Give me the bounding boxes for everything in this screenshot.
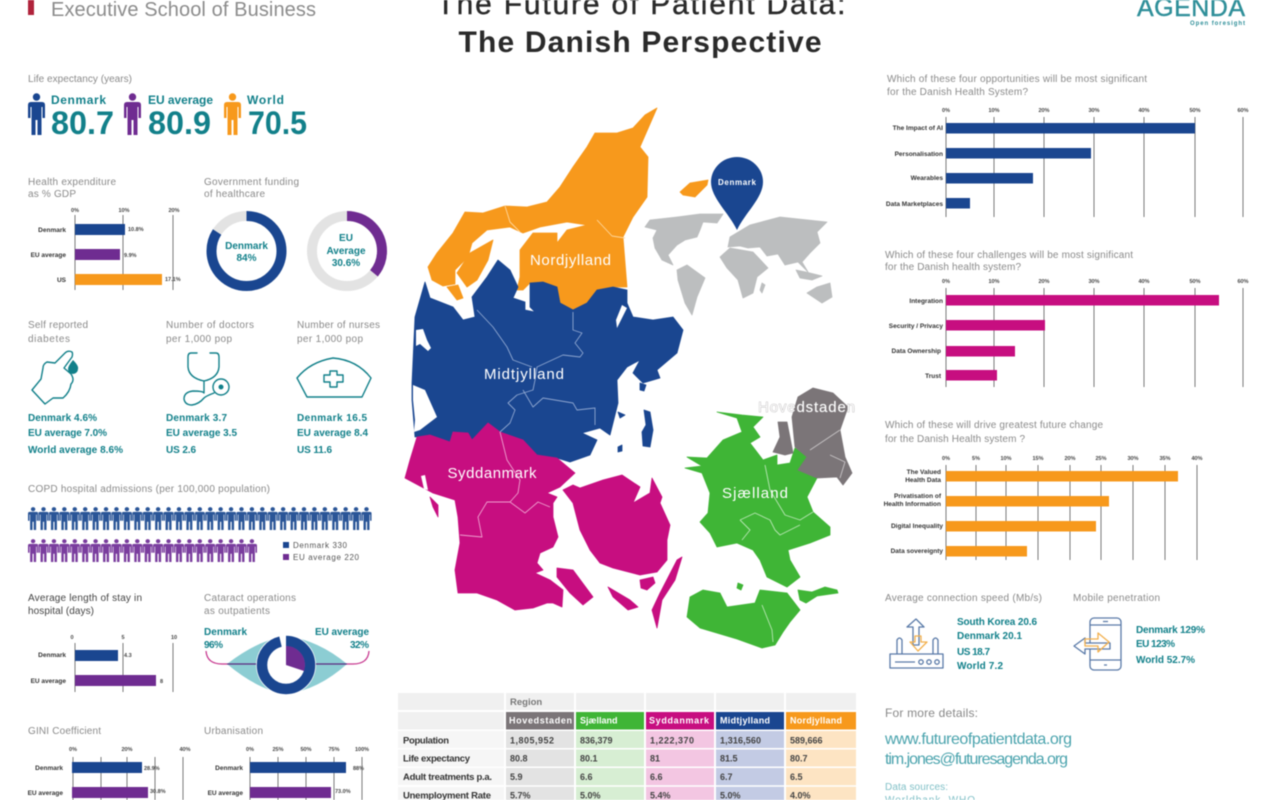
chart: health expenditure bbox=[28, 177, 181, 290]
chart: challenges bbox=[885, 250, 1249, 387]
chart: government funding donuts: Government funding bbox=[204, 177, 299, 188]
world continents bbox=[645, 214, 832, 315]
chart: average length of stay: 0 bbox=[70, 635, 74, 641]
chart: COPD hospital admissions pictogram: COPD hospital admissions (per 100,000 population) bbox=[28, 484, 270, 495]
stat: life expectancy values bbox=[51, 93, 307, 141]
chart: opportunities: for the Danish Health System? bbox=[887, 87, 1028, 98]
panel: mobile penetration bbox=[1073, 593, 1205, 670]
chart: urbanisation: 73.0% bbox=[335, 789, 351, 795]
contact details: Data sources: bbox=[885, 782, 948, 793]
legend: Denmark 330 bbox=[293, 541, 348, 550]
panel: number of doctors: US 2.6 bbox=[166, 445, 196, 456]
region borders bbox=[460, 206, 845, 642]
chart: urbanisation: Denmark bbox=[215, 765, 243, 772]
donut: Denmark: 84% bbox=[236, 253, 257, 264]
icon: stethoscope bbox=[184, 353, 229, 405]
donut: pupil bbox=[256, 635, 316, 695]
chart: cataract operations eye bbox=[204, 593, 369, 695]
chart: health expenditure: 20% bbox=[168, 208, 180, 214]
chart: urbanisation: 25% bbox=[272, 747, 284, 753]
table body cells: Adult treatments p.a. bbox=[403, 772, 492, 783]
chart: urbanisation: 75% bbox=[328, 747, 340, 753]
chart: future change: 40% bbox=[1191, 456, 1203, 462]
contact details: For more details: bbox=[885, 706, 978, 720]
chart: urbanisation bbox=[204, 726, 369, 800]
chart: GINI coefficient: 30.8% bbox=[150, 789, 166, 795]
chart: average length of stay: Average length of stay in bbox=[28, 593, 142, 604]
panel: number of doctors: Denmark 3.7 bbox=[166, 413, 227, 424]
chart: health expenditure: Denmark bbox=[38, 227, 66, 234]
icon: nurse hat bbox=[297, 358, 371, 397]
panel: self-reported diabetes: World average 8.6% bbox=[28, 445, 123, 456]
panel: life expectancy bbox=[28, 74, 307, 141]
chart: average length of stay: 4.3 bbox=[124, 653, 132, 659]
chart: challenges: 0% bbox=[942, 279, 950, 285]
chart: health expenditure: 17.1% bbox=[165, 277, 181, 283]
stat: life expectancy values: World bbox=[247, 93, 284, 107]
table header cells: Midtjylland bbox=[720, 716, 770, 726]
chart: future change: Health Data bbox=[905, 477, 941, 484]
chart: average length of stay bbox=[28, 593, 177, 692]
chart: GINI coefficient: 28.9% bbox=[144, 766, 160, 772]
table header cells: Hovedstaden bbox=[509, 716, 572, 726]
chart: future change: 10% bbox=[1000, 456, 1012, 462]
chart: health expenditure: as % GDP bbox=[28, 189, 76, 200]
table body cells: 81 bbox=[650, 754, 660, 764]
contact details: tim.jones@futuresagenda.org bbox=[885, 751, 1068, 768]
chart: cataract operations eye: EU average bbox=[315, 627, 369, 638]
region labels: Hovedstaden bbox=[758, 399, 855, 416]
water: Rømø gap bbox=[421, 475, 428, 490]
chart: average length of stay: 8 bbox=[160, 679, 163, 685]
chart: average length of stay: hospital (days) bbox=[28, 606, 94, 617]
region labels: Nordjylland bbox=[530, 252, 611, 269]
panel: number of nurses bbox=[297, 320, 380, 456]
stat: life expectancy values: Denmark bbox=[51, 93, 106, 107]
chart: average length of stay: Denmark bbox=[38, 652, 66, 659]
icon: location pin Denmark: Denmark bbox=[718, 178, 757, 187]
water: Nissum fjord bbox=[416, 329, 431, 351]
table body cells: 6.6 bbox=[580, 772, 593, 782]
table header cells bbox=[398, 693, 856, 730]
chart: challenges: 60% bbox=[1237, 279, 1249, 285]
title: The Danish Perspective bbox=[458, 26, 822, 59]
panel: mobile penetration: Mobile penetration bbox=[1073, 593, 1160, 604]
panel: number of nurses: US 11.6 bbox=[297, 445, 332, 456]
chart: opportunities: 30% bbox=[1088, 108, 1100, 114]
chart: future change: Digital Inequality bbox=[891, 523, 943, 530]
chart: future change: 20% bbox=[1064, 456, 1076, 462]
icon: phone with arrows bbox=[1074, 618, 1121, 670]
chart: challenges: Security / Privacy bbox=[889, 323, 943, 330]
icon: finger with blood drop bbox=[32, 351, 78, 404]
table body cells bbox=[398, 731, 856, 800]
legend: EU average 220 bbox=[293, 553, 360, 562]
chart: government funding donuts bbox=[204, 177, 382, 286]
table body cells: 80.8 bbox=[510, 754, 528, 764]
panel: self-reported diabetes bbox=[28, 320, 123, 456]
table body cells: 80.7 bbox=[790, 754, 808, 764]
chart: GINI coefficient: 20% bbox=[121, 747, 133, 753]
chart: opportunities: 10% bbox=[988, 108, 1000, 114]
panel: number of doctors bbox=[166, 320, 254, 456]
chart: challenges: Which of these four challenges will be most significant bbox=[885, 250, 1133, 261]
panel: mobile penetration: EU 123% bbox=[1136, 639, 1175, 650]
region: Midtjylland bbox=[412, 260, 683, 462]
panel: connection speed: US 18.7 bbox=[957, 647, 990, 658]
panel: life expectancy: Life expectancy (years) bbox=[28, 74, 132, 85]
chart: opportunities: 20% bbox=[1038, 108, 1050, 114]
icon: eye bbox=[227, 636, 347, 694]
chart: urbanisation: 0% bbox=[246, 747, 254, 753]
chart: health expenditure: US bbox=[57, 277, 67, 284]
icon: person EU bbox=[124, 93, 141, 135]
panel: connection speed: Average connection speed (Mb/s) bbox=[885, 593, 1042, 604]
panel: connection speed: South Korea 20.6 bbox=[957, 617, 1037, 628]
panel: mobile penetration: World 52.7% bbox=[1136, 655, 1195, 666]
chart: GINI coefficient: Denmark bbox=[35, 765, 63, 772]
chart: future change: 25% bbox=[1095, 456, 1107, 462]
table body cells: 5.9 bbox=[510, 772, 523, 782]
table header cells: Syddanmark bbox=[649, 716, 710, 726]
table: regional statistics bbox=[398, 693, 856, 800]
chart: health expenditure: 10% bbox=[118, 208, 130, 214]
chart: GINI coefficient: 0% bbox=[69, 747, 77, 753]
chart: opportunities: The Impact of AI bbox=[893, 125, 943, 132]
donut: EU average: 30.6% bbox=[332, 258, 360, 269]
chart: opportunities bbox=[886, 74, 1249, 217]
chart: future change: 35% bbox=[1159, 456, 1171, 462]
donut: EU average: EU bbox=[339, 233, 353, 244]
region labels: Syddanmark bbox=[448, 465, 537, 482]
region: Nordjylland bbox=[428, 108, 708, 310]
chart: future change: 0% bbox=[942, 456, 950, 462]
panel: mobile penetration: Denmark 129% bbox=[1136, 625, 1205, 636]
chart: urbanisation: Urbanisation bbox=[204, 726, 263, 737]
chart: challenges: Trust bbox=[925, 373, 942, 380]
table body cells: 81.5 bbox=[720, 754, 738, 764]
icon: person World bbox=[224, 93, 241, 135]
chart: future change: The Valued bbox=[907, 469, 941, 476]
chart: opportunities: 0% bbox=[942, 108, 950, 114]
panel: number of nurses: Denmark 16.5 bbox=[297, 413, 367, 424]
region: Hovedstaden bbox=[773, 388, 852, 485]
chart: urbanisation: 50% bbox=[300, 747, 312, 753]
donut: EU average: Average bbox=[326, 246, 366, 257]
chart: opportunities: Which of these four opportunities will be most significant bbox=[887, 74, 1147, 85]
chart: cataract operations eye: Denmark bbox=[204, 627, 247, 638]
chart: opportunities: Data Marketplaces bbox=[886, 201, 943, 208]
stat: life expectancy values: 80.7 bbox=[51, 105, 114, 141]
chart: health expenditure: 9.9% bbox=[124, 253, 137, 259]
table body cells: Life expectancy bbox=[403, 754, 471, 764]
pictogram row: Denmark bbox=[28, 507, 372, 530]
region labels bbox=[448, 252, 855, 502]
table body cells: 1,805,952 bbox=[510, 736, 554, 746]
chart: health expenditure: 10.8% bbox=[128, 227, 144, 233]
chart: future change: for the Danish Health system ? bbox=[885, 434, 1025, 445]
icon: person Denmark bbox=[28, 93, 45, 135]
donut: Denmark bbox=[212, 216, 282, 286]
chart: challenges: 20% bbox=[1038, 279, 1050, 285]
chart: opportunities: 50% bbox=[1189, 108, 1201, 114]
table body cells: 6.6 bbox=[650, 772, 663, 782]
chart: COPD hospital admissions pictogram bbox=[28, 484, 372, 562]
region labels: Midtjylland bbox=[484, 366, 564, 383]
panel: number of doctors: EU average 3.5 bbox=[166, 428, 237, 439]
contact details bbox=[884, 706, 1072, 800]
title bbox=[436, 0, 846, 59]
chart: future change: Privatisation of bbox=[894, 493, 942, 500]
table header cells: Region bbox=[510, 697, 542, 708]
chart: future change bbox=[884, 420, 1203, 560]
chart: challenges: 30% bbox=[1088, 279, 1100, 285]
panel: self-reported diabetes: EU average 7.0% bbox=[28, 428, 107, 439]
legend bbox=[283, 541, 360, 562]
world map with location pin bbox=[645, 157, 832, 315]
chart: GINI coefficient: EU average bbox=[28, 790, 63, 797]
table body cells: 6.7 bbox=[720, 772, 733, 782]
chart: future change: Which of these will drive greatest future change bbox=[885, 420, 1103, 431]
pictogram row: EU average bbox=[28, 539, 257, 562]
stat: life expectancy values: 80.9 bbox=[148, 105, 211, 141]
water: fjords in Midtjylland bbox=[413, 385, 437, 432]
chart: challenges: Integration bbox=[909, 298, 943, 305]
table body cells: 80.1 bbox=[580, 754, 598, 764]
panel: number of doctors: Number of doctors bbox=[166, 320, 254, 331]
chart: opportunities: Personalisation bbox=[895, 151, 943, 158]
chart: opportunities: 40% bbox=[1138, 108, 1150, 114]
panel: self-reported diabetes: Self reported bbox=[28, 320, 88, 331]
chart: urbanisation: EU average bbox=[208, 790, 243, 797]
panel: connection speed: World 7.2 bbox=[957, 661, 1003, 672]
chart: challenges: Data Ownership bbox=[892, 348, 941, 355]
table body cells: 836,379 bbox=[580, 736, 613, 746]
chart: challenges: 10% bbox=[988, 279, 1000, 285]
table header cells: Nordjylland bbox=[790, 716, 842, 726]
chart: opportunities: 60% bbox=[1237, 108, 1249, 114]
chart: cataract operations eye: 32% bbox=[350, 640, 369, 651]
chart: average length of stay: EU average bbox=[31, 678, 66, 685]
chart: GINI coefficient: 40% bbox=[179, 747, 191, 753]
chart: challenges: 50% bbox=[1189, 279, 1201, 285]
connector lines bbox=[206, 651, 369, 664]
chart: cataract operations eye: Cataract operations bbox=[204, 593, 296, 604]
chart: health expenditure: EU average bbox=[31, 252, 66, 259]
panel: number of nurses: EU average 8.4 bbox=[297, 428, 368, 439]
donut: EU average bbox=[312, 216, 382, 286]
logo: Agenda: Open foresight bbox=[1190, 21, 1245, 27]
chart: future change: Health Information bbox=[884, 501, 941, 508]
panel: self-reported diabetes: diabetes bbox=[28, 334, 70, 345]
region: Syddanmark bbox=[405, 423, 682, 628]
chart: challenges: 40% bbox=[1138, 279, 1150, 285]
panel: self-reported diabetes: Denmark 4.6% bbox=[28, 413, 97, 424]
table header cells: Sjælland bbox=[580, 716, 618, 726]
chart: cataract operations eye: as outpatients bbox=[204, 606, 270, 617]
chart: future change: Data sovereignty bbox=[891, 548, 943, 555]
stat: life expectancy values: 70.5 bbox=[248, 105, 307, 141]
chart: health expenditure: Health expenditure bbox=[28, 177, 116, 188]
chart: opportunities: Wearables bbox=[911, 175, 943, 182]
chart: average length of stay: 5 bbox=[121, 635, 125, 641]
donut: Denmark: Denmark bbox=[225, 241, 268, 252]
panel: connection speed bbox=[885, 593, 1042, 672]
panel: connection speed: Denmark 20.1 bbox=[957, 631, 1022, 642]
chart: future change: 5% bbox=[972, 456, 980, 462]
table body cells: 6.5 bbox=[790, 772, 803, 782]
region: Sjælland bbox=[685, 412, 838, 648]
stat: life expectancy values: EU average bbox=[148, 93, 213, 107]
chart: GINI coefficient: GINI Coefficient bbox=[28, 726, 101, 737]
panel: number of doctors: per 1,000 pop bbox=[166, 334, 232, 345]
table body cells: Population bbox=[403, 736, 449, 746]
chart: urbanisation: 88% bbox=[353, 766, 364, 772]
chart: GINI coefficient bbox=[28, 726, 191, 800]
chart: cataract operations eye: 96% bbox=[204, 640, 223, 651]
chart: future change: 30% bbox=[1127, 456, 1139, 462]
panel: number of nurses: Number of nurses bbox=[297, 320, 380, 331]
table body cells: 1,222,370 bbox=[650, 736, 694, 746]
chart: health expenditure: 0% bbox=[71, 208, 79, 214]
chart: challenges: for the Danish health system? bbox=[885, 262, 1021, 273]
table body cells: 589,666 bbox=[790, 736, 823, 746]
panel: number of nurses: per 1,000 pop bbox=[297, 334, 363, 345]
map: Denmark regions bbox=[405, 108, 855, 648]
contact details: www.futureofpatientdata.org bbox=[884, 731, 1072, 748]
table body cells: 1,316,560 bbox=[720, 736, 761, 746]
chart: average length of stay: 10 bbox=[171, 635, 177, 641]
region labels: Sjælland bbox=[722, 485, 788, 502]
chart: future change: 15% bbox=[1032, 456, 1044, 462]
chart: government funding donuts: of healthcare bbox=[204, 189, 265, 200]
icon: router with arrows bbox=[890, 619, 943, 668]
chart: urbanisation: 100% bbox=[355, 747, 369, 753]
icon: location pin Denmark bbox=[711, 157, 763, 230]
water: Horsens bay bbox=[616, 305, 627, 328]
